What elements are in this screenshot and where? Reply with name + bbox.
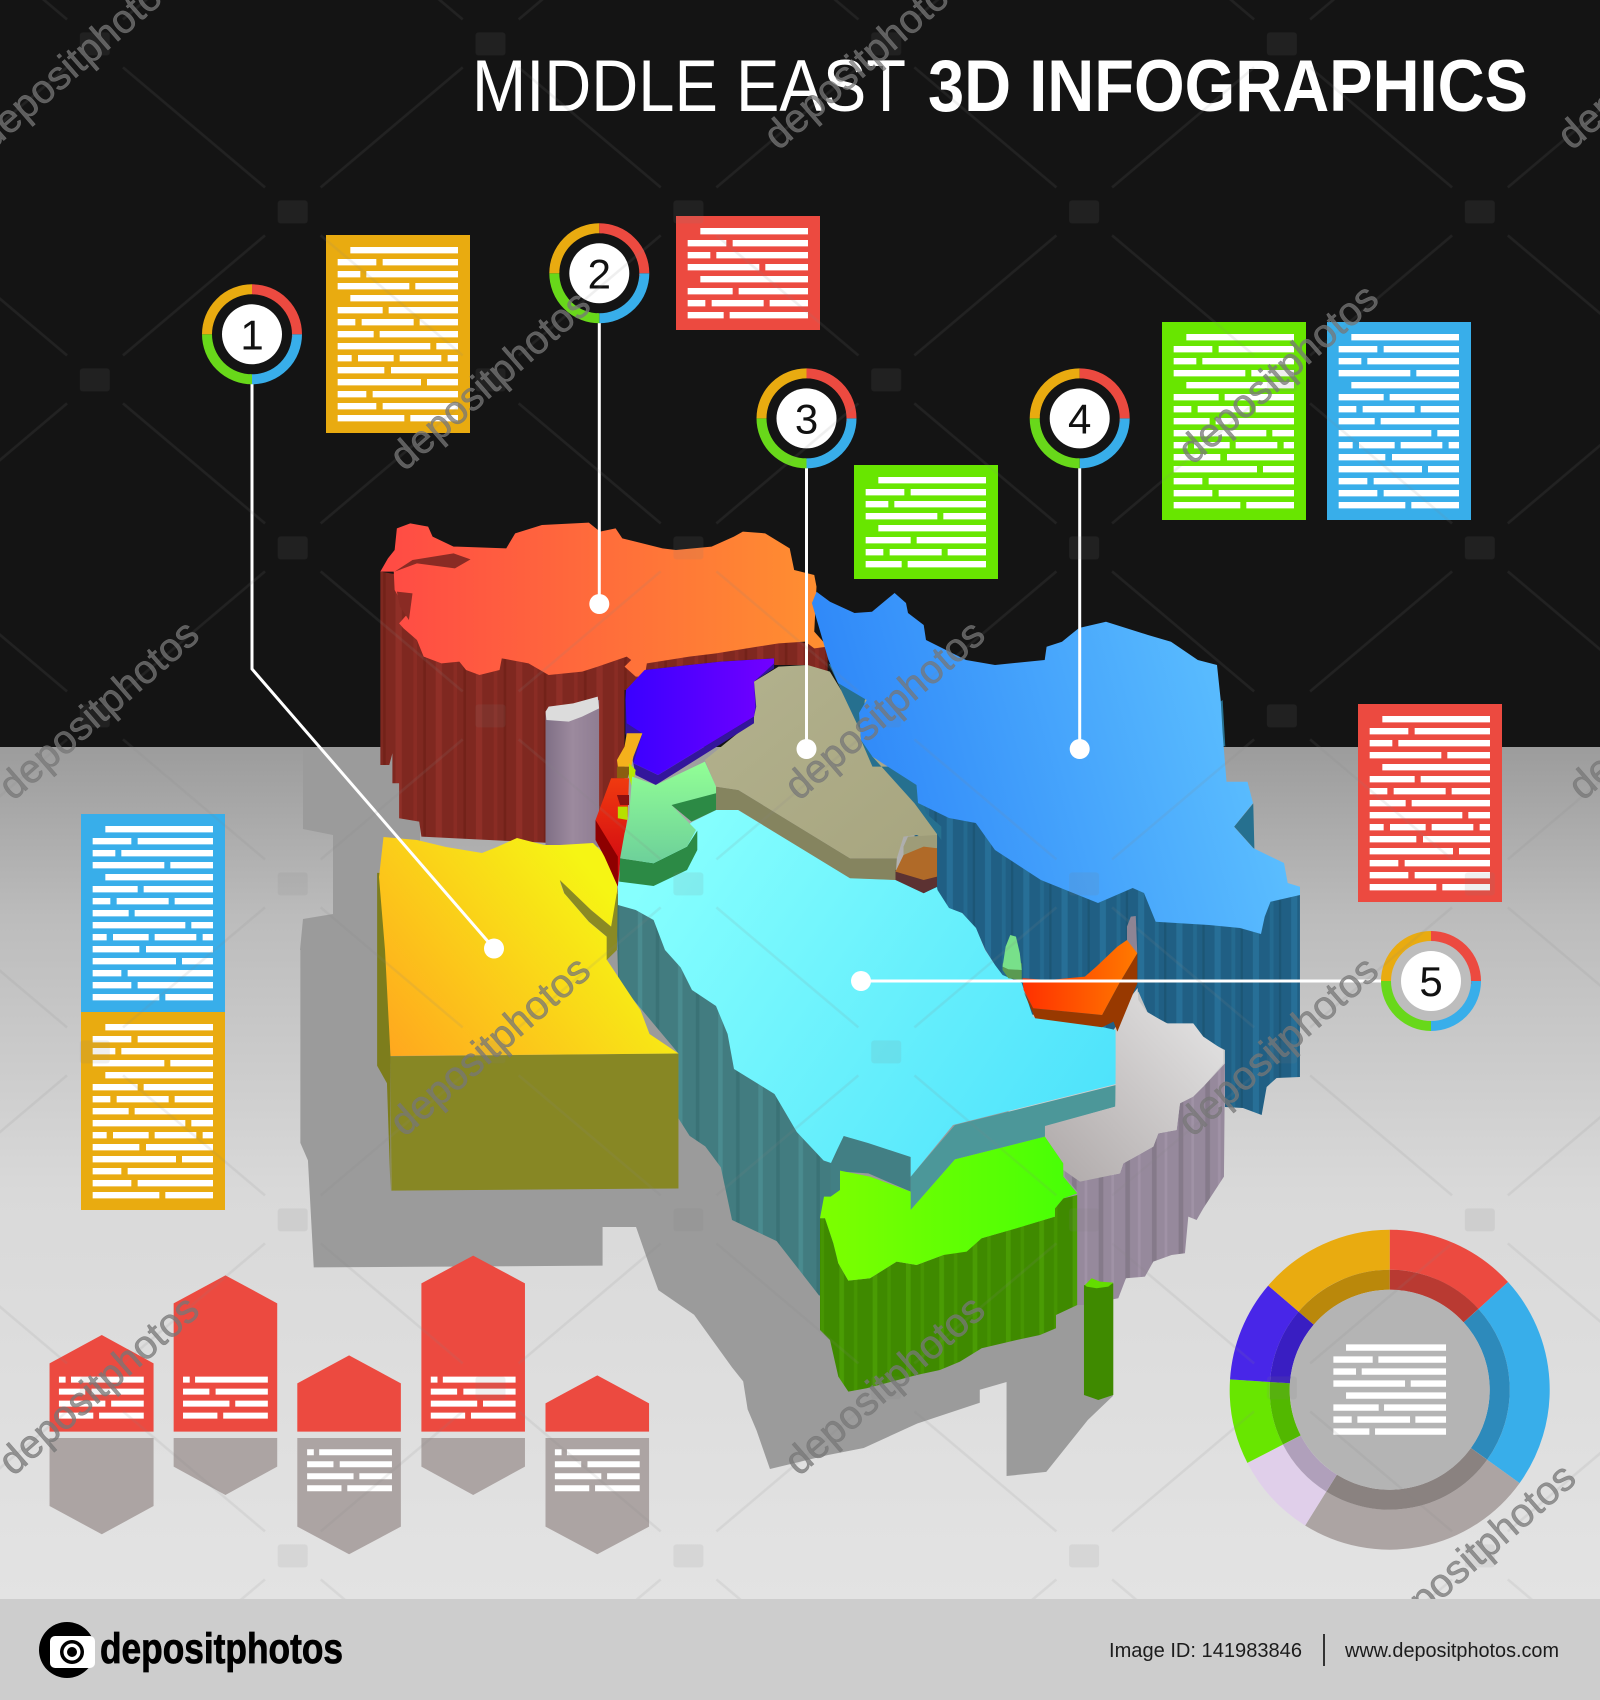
Oman side wall xyxy=(1045,1063,1225,1305)
column 4 xyxy=(421,1256,525,1495)
column 2 xyxy=(174,1275,277,1495)
Yemen side wall xyxy=(820,1195,1077,1392)
footer bar xyxy=(0,1599,1600,1700)
United Arab Emirates xyxy=(1022,916,1137,1032)
title: 3D INFOGRAPHICS xyxy=(928,46,1528,127)
text panel: blue right xyxy=(1327,322,1471,520)
text panel: green middle xyxy=(854,465,998,579)
title: MIDDLE EAST xyxy=(472,46,906,127)
footer logo icon xyxy=(39,1622,95,1678)
3D map of the Middle East xyxy=(377,523,1300,1400)
Cyprus xyxy=(546,697,599,847)
Iraq side wall xyxy=(716,787,897,880)
watermarks: depositphotos xyxy=(381,948,599,1145)
column 1 xyxy=(50,1335,154,1534)
Turkey side wall xyxy=(380,572,828,847)
background: dark upper wall xyxy=(0,0,1600,748)
number pin 4 xyxy=(1035,373,1125,463)
Egypt top xyxy=(379,837,678,1056)
Yemen top xyxy=(820,1137,1077,1281)
leader line 3 xyxy=(796,468,816,759)
leader line 5 xyxy=(851,971,1381,991)
Iran side wall xyxy=(915,787,1300,1115)
Kuwait xyxy=(896,835,937,893)
watermarks: depositphotos xyxy=(1170,275,1387,472)
footer website: www.depositphotos.com xyxy=(1344,1640,1559,1662)
Iran top xyxy=(811,592,1300,934)
Lebanon xyxy=(617,733,642,778)
number pin 1 xyxy=(207,289,297,379)
Iraq top xyxy=(705,665,937,858)
Saudi Arabia top xyxy=(618,810,1116,1177)
leader line 1 xyxy=(252,384,504,958)
Israel and Palestine xyxy=(596,763,636,887)
Socotra island xyxy=(1084,1278,1113,1400)
donut chart xyxy=(1192,1192,1587,1587)
bar chart: arrow columns xyxy=(50,1256,649,1554)
text panel: green right xyxy=(1162,322,1306,520)
number pin 4: 4 xyxy=(1068,395,1091,442)
leader line 2 xyxy=(589,323,609,614)
Iran side strips and underlay xyxy=(828,663,1254,849)
Jordan xyxy=(619,762,716,886)
title xyxy=(472,46,1528,127)
watermarks: depositphotos xyxy=(776,611,993,808)
background: grey floor xyxy=(0,747,1600,1600)
number pin 3: 3 xyxy=(795,395,818,442)
column 5 xyxy=(546,1375,649,1554)
text panel: blue left xyxy=(81,814,225,1012)
text panel: orange top xyxy=(326,235,470,433)
text panel: red right xyxy=(1358,704,1502,902)
watermarks: depositphotos xyxy=(1367,1455,1584,1652)
leader line 4 xyxy=(1070,468,1090,759)
Qatar xyxy=(1003,935,1022,980)
footer image id: Image ID: 141983846 xyxy=(1109,1640,1302,1662)
footer logo wordmark: depositphotos xyxy=(100,1625,343,1673)
Egypt sides xyxy=(377,873,678,1191)
Syria xyxy=(625,658,774,785)
number pin 5 xyxy=(1386,936,1476,1026)
map shadow on floor xyxy=(300,748,1113,1476)
Saudi underside bands xyxy=(831,1085,1116,1210)
watermarks: depositphotos xyxy=(776,1287,993,1484)
footer divider xyxy=(1323,1634,1325,1666)
column 3 xyxy=(297,1355,401,1554)
Gulf of Suez notch xyxy=(560,880,618,960)
number pin 2 xyxy=(554,228,644,318)
text panel: red top xyxy=(676,216,820,330)
Turkey top xyxy=(380,523,828,677)
watermarks: depositphotos xyxy=(381,282,599,479)
number pin 3 xyxy=(762,373,852,463)
Saudi Arabia side wall xyxy=(616,894,850,1295)
text panel: orange left xyxy=(81,1012,225,1210)
Oman top xyxy=(1045,988,1223,1182)
number pin 1: 1 xyxy=(240,311,264,358)
number pin 5: 5 xyxy=(1419,958,1443,1005)
number pin 2: 2 xyxy=(588,250,611,297)
watermarks: depositphotos xyxy=(1170,948,1387,1145)
